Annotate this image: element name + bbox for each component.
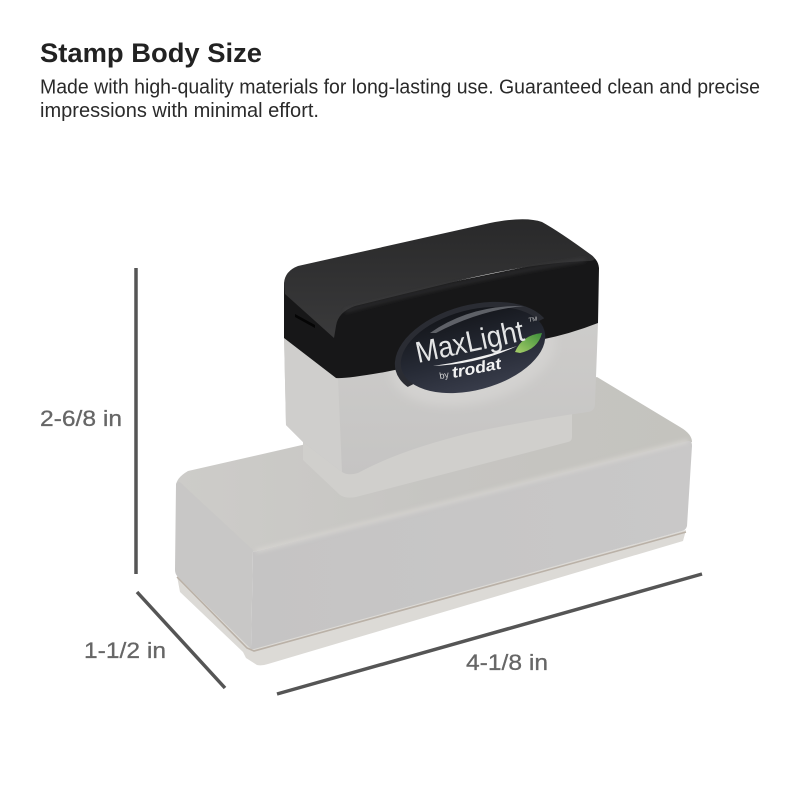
logo trademark: TM [528, 317, 538, 324]
depth label: 1-1/2 in [84, 638, 166, 663]
cap top surface [284, 219, 594, 338]
height line [134, 268, 138, 574]
description text [40, 76, 760, 122]
logo oval [391, 292, 555, 408]
logo leaf [515, 333, 542, 353]
plate seam [177, 532, 686, 651]
width line [277, 574, 702, 694]
cap front and side [284, 254, 599, 378]
oval halo [380, 290, 566, 422]
stamp neck [303, 405, 572, 498]
logo byline: by [439, 369, 450, 381]
body main [284, 323, 598, 474]
stamp base block [175, 377, 692, 665]
description text: impressions with minimal effort. [40, 100, 319, 122]
stamp illustration [175, 219, 692, 665]
oval dark ring [395, 302, 544, 387]
logo trodat: trodat [451, 356, 504, 382]
cap side slot [295, 314, 315, 328]
logo badge [391, 292, 555, 408]
body left side [284, 336, 342, 472]
height label: 2-6/8 in [40, 406, 122, 431]
description text: Made with high-quality materials for long-lasting use. Guaranteed clean and precise [40, 76, 760, 98]
depth line [137, 592, 225, 688]
base plate [177, 530, 686, 665]
title: Stamp Body Size [40, 38, 262, 68]
cap edge highlight [345, 260, 585, 311]
logo wordmark: MaxLight [413, 315, 528, 370]
stamp grey body [284, 323, 598, 474]
dimension: depth [84, 592, 225, 688]
black cap [284, 219, 599, 387]
base top edge highlight [256, 441, 688, 551]
logo gloss [430, 306, 524, 333]
base top surface [176, 377, 692, 552]
base left face [175, 482, 253, 649]
base front face [251, 441, 692, 649]
logo swoosh [433, 346, 517, 366]
dimension: width [277, 574, 702, 694]
width label: 4-1/8 in [466, 650, 548, 675]
